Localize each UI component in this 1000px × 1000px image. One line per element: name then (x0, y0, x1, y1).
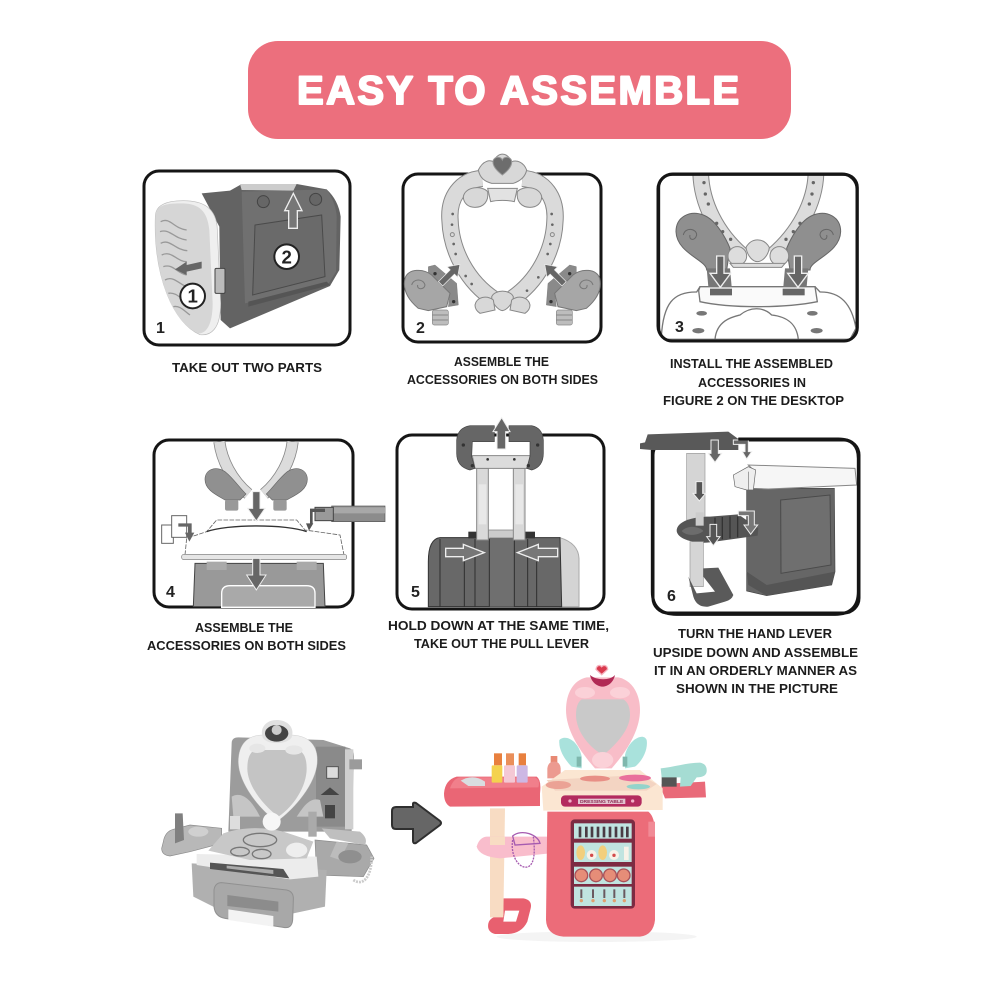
dryer (661, 763, 707, 787)
perfume bottle (547, 756, 561, 778)
step caption (388, 618, 609, 651)
step caption: TAKE OUT THE PULL LEVER (414, 636, 590, 651)
title banner (248, 41, 791, 139)
mirror (566, 665, 640, 768)
panel: step 6 (640, 432, 859, 696)
step caption: IT IN AN ORDERLY MANNER AS (654, 663, 857, 678)
illustration: tabletop on case (162, 442, 385, 607)
step caption: INSTALL THE ASSEMBLED (670, 356, 833, 371)
panel: step 4 (147, 440, 385, 653)
vanity top (542, 770, 663, 811)
step number: 6 (667, 588, 676, 605)
door shelf items (575, 827, 630, 902)
arrow: to assembled toy (392, 803, 441, 843)
panel: step 2 (403, 154, 601, 387)
illustration: side table assembly (640, 432, 858, 614)
panel: step 3 (658, 173, 857, 408)
step number: 2 (416, 320, 425, 337)
panel: step 5 (388, 418, 609, 651)
step number: 3 (675, 319, 684, 336)
right tray (662, 782, 706, 798)
step caption: ASSEMBLE THE (195, 620, 293, 635)
step number: 1 (156, 320, 165, 337)
illustration: suitcase and two parts (155, 184, 341, 335)
step caption (407, 354, 598, 387)
step caption: ACCESSORIES ON BOTH SIDES (407, 372, 598, 387)
base handle (488, 898, 531, 934)
step caption: ACCESSORIES IN (698, 375, 806, 390)
step number: 4 (166, 584, 175, 601)
nail polish (492, 753, 528, 783)
pole (490, 808, 505, 917)
step caption: ASSEMBLE THE (454, 354, 549, 369)
closed toy greyscale photo (162, 720, 374, 928)
step caption: ACCESSORIES ON BOTH SIDES (147, 638, 346, 653)
handle (214, 883, 293, 928)
illustration: pull lever (428, 418, 579, 607)
step caption: UPSIDE DOWN AND ASSEMBLE (653, 645, 858, 660)
left wing (404, 259, 465, 325)
necklace (512, 833, 540, 867)
step caption: FIGURE 2 ON THE DESKTOP (663, 393, 844, 408)
case body (546, 812, 655, 937)
panel: step 1 (144, 171, 350, 375)
illustration: suitcase and two parts: 2 (281, 247, 292, 268)
illustration: mirror and wings (404, 154, 600, 325)
pink shelf (477, 837, 550, 858)
step caption: TAKE OUT TWO PARTS (172, 360, 322, 375)
step caption (653, 626, 858, 696)
title banner: EASY TO ASSEMBLE (297, 69, 739, 113)
step caption: TURN THE HAND LEVER (678, 626, 833, 641)
step caption: SHOWN IN THE PICTURE (676, 681, 838, 696)
right wing (540, 259, 600, 325)
step caption (663, 356, 844, 408)
illustration: suitcase and two parts: 1 (187, 286, 198, 307)
assembled toy colour photo (444, 665, 707, 942)
vanity top: DRESSING TABLE (580, 799, 623, 804)
step number: 5 (411, 584, 420, 601)
left tray (444, 777, 540, 807)
step caption: HOLD DOWN AT THE SAME TIME, (388, 618, 609, 633)
illustration: mirror on desktop (659, 173, 857, 341)
wings (559, 737, 647, 768)
step caption (147, 620, 346, 653)
